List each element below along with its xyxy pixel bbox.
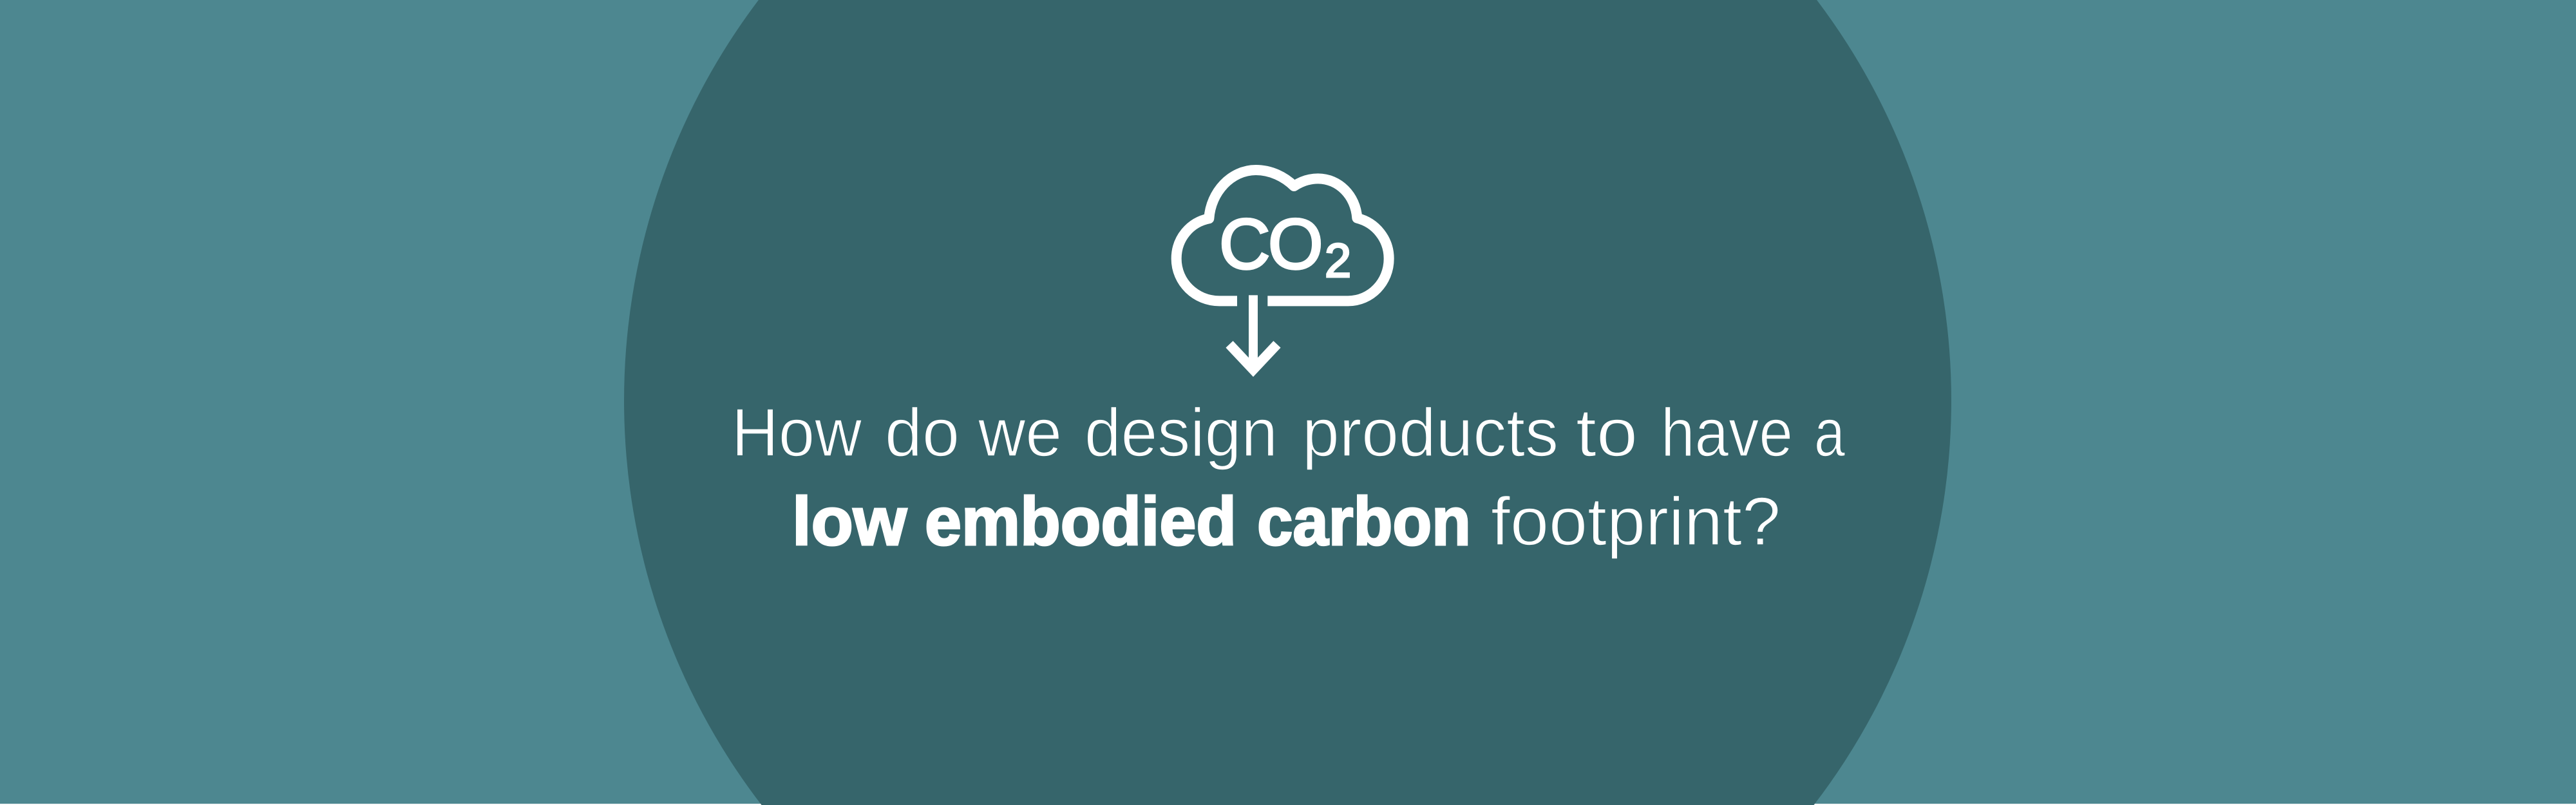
heading line 1: to	[1576, 395, 1638, 471]
icon: CO2 label: O	[1268, 205, 1323, 284]
heading line 1: do	[885, 395, 960, 471]
heading line 1: we	[978, 395, 1062, 471]
heading line 2: footprint?	[1491, 484, 1781, 560]
heading line 1: products	[1302, 395, 1558, 471]
heading line 1: design	[1084, 395, 1278, 471]
icon: CO2 label: C	[1219, 205, 1270, 284]
icon: subscript 2: 2	[1325, 234, 1351, 287]
heading line 1: a	[1814, 395, 1845, 471]
icon: downward arrow	[1229, 295, 1277, 370]
heading line 1: have	[1661, 395, 1793, 471]
icon: CO2 cloud with downward arrow	[1177, 170, 1389, 370]
central dark circle	[624, 0, 1951, 805]
icon: cloud outline	[1177, 170, 1389, 301]
heading line 2: low	[792, 484, 907, 560]
heading line 2: carbon	[1257, 484, 1471, 560]
heading line 1: How	[732, 395, 862, 471]
heading line 2: embodied	[925, 484, 1236, 560]
heading	[732, 395, 1845, 560]
